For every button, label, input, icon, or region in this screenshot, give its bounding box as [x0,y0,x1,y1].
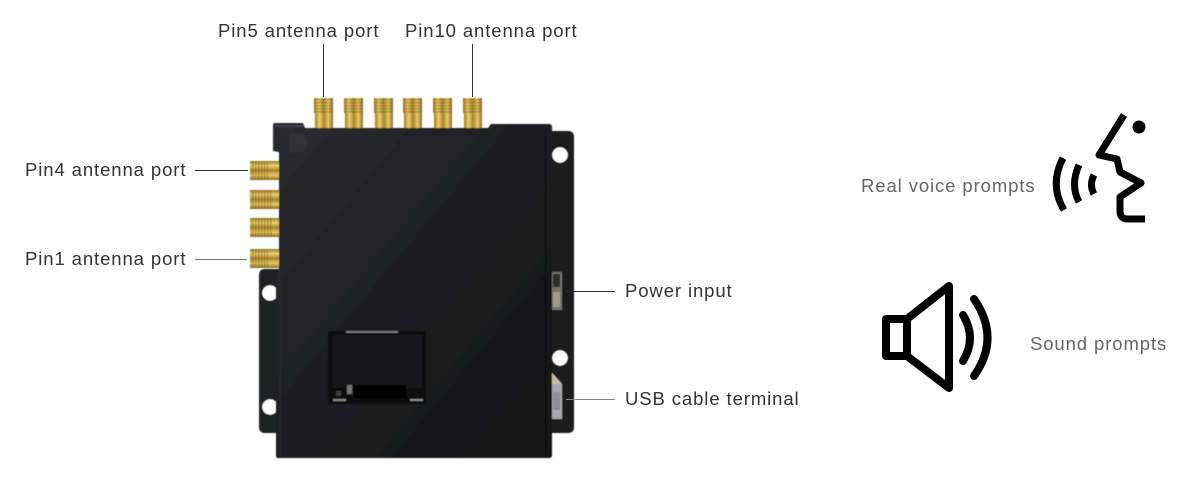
OLED display window [328,331,426,404]
label: Pin4 antenna port: Pin4 antenna port [25,159,186,180]
label: Pin10 antenna port: Pin10 antenna port [405,20,578,41]
mounting flanges with holes [545,131,574,433]
label: Pin1 antenna port: Pin1 antenna port [25,248,186,269]
icon: speaker [886,286,988,388]
real voice prompts text: Real voice prompts [861,175,1036,196]
label: USB cable terminal: USB cable terminal [625,388,800,409]
left antenna connectors [250,161,280,268]
label: Pin5 antenna port: Pin5 antenna port [218,20,379,41]
label: Power input: Power input [625,280,733,301]
top antenna connectors [314,98,482,128]
power input port [552,272,562,310]
sound prompts text: Sound prompts [1030,333,1167,354]
device photo [250,98,574,458]
main enclosure [273,123,552,458]
USB cable terminal [552,373,562,419]
icon: speaking face [1056,115,1146,219]
hex screw mark [289,133,308,153]
